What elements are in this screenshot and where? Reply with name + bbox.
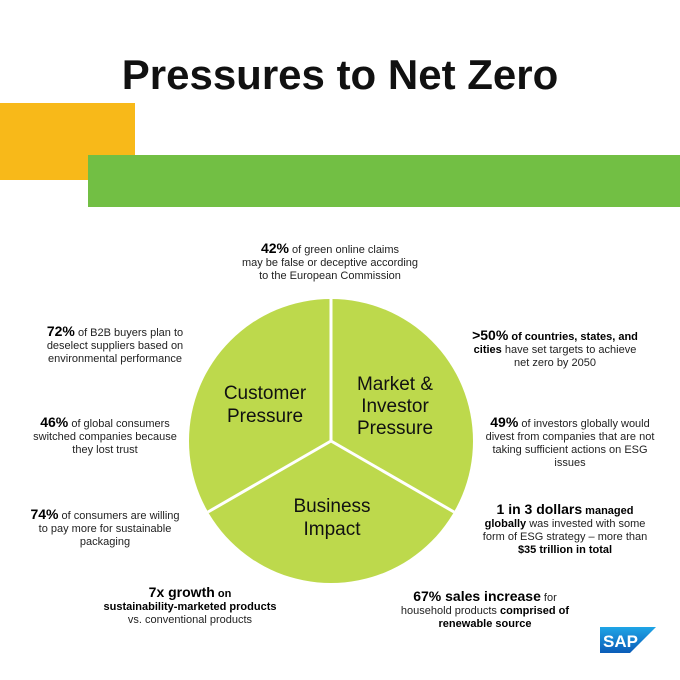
stat left 3	[30, 506, 180, 548]
stat right 2: taking sufficient actions on ESG	[492, 444, 648, 456]
stat right 2: issues	[554, 457, 586, 469]
green bar	[88, 155, 680, 207]
stat right 3	[482, 501, 647, 556]
title: Pressures to Net Zero	[122, 51, 558, 98]
stat bottom left	[104, 584, 276, 626]
pie chart: Pressure	[227, 406, 303, 427]
stat top: may be false or deceptive according	[242, 257, 418, 269]
stat right 3: $35 trillion in total	[518, 544, 612, 556]
stat right 1	[472, 327, 638, 369]
stat right 1: >50% of countries, states, and	[472, 327, 638, 343]
stat left 2	[33, 414, 177, 456]
pie chart: Pressure	[357, 418, 433, 439]
stat right 2	[486, 414, 654, 469]
stat bottom right	[401, 588, 570, 630]
stat left 2: they lost trust	[72, 444, 138, 456]
stat top: to the European Commission	[259, 270, 401, 282]
pie chart: Customer	[224, 383, 307, 404]
icon: SAP logo	[600, 627, 656, 653]
stat left 1: environmental performance	[48, 353, 182, 365]
stat bottom left: sustainability-marketed products	[104, 601, 276, 613]
pie chart: Market &	[357, 374, 433, 395]
stat left 1: 72% of B2B buyers plan to	[47, 323, 183, 339]
stat left 2: 46% of global consumers	[40, 414, 170, 430]
stat left 1	[47, 323, 183, 365]
stat right 2: 49% of investors globally would	[490, 414, 650, 430]
stat right 1: cities have set targets to achieve	[474, 344, 636, 356]
stat bottom right: renewable source	[439, 618, 531, 630]
stat bottom left: 7x growth on	[149, 584, 231, 600]
stat bottom left: vs. conventional products	[128, 614, 252, 626]
pie chart: Business	[293, 496, 371, 517]
stat top: 42% of green online claims	[261, 240, 399, 256]
stat right 2: divest from companies that are not	[486, 431, 654, 443]
stat left 3: packaging	[80, 536, 130, 548]
icon: SAP logo: SAP	[603, 632, 638, 651]
stat left 3: to pay more for sustainable	[39, 523, 171, 535]
stat right 3: form of ESG strategy – more than	[483, 531, 647, 543]
stat right 1: net zero by 2050	[514, 357, 596, 369]
stat right 3: 1 in 3 dollars managed	[497, 501, 633, 517]
pie chart: Impact	[303, 519, 361, 540]
stat left 2: switched companies because	[33, 431, 177, 443]
stat left 1: deselect suppliers based on	[47, 340, 183, 352]
stat bottom right: 67% sales increase for	[413, 588, 557, 604]
pie chart: Investor	[361, 396, 429, 417]
stat top	[242, 240, 418, 282]
yellow block	[0, 103, 135, 180]
stat bottom right: household products comprised of	[401, 605, 569, 617]
stat left 3: 74% of consumers are willing	[30, 506, 180, 522]
stat right 3: globally was invested with some	[485, 518, 645, 530]
